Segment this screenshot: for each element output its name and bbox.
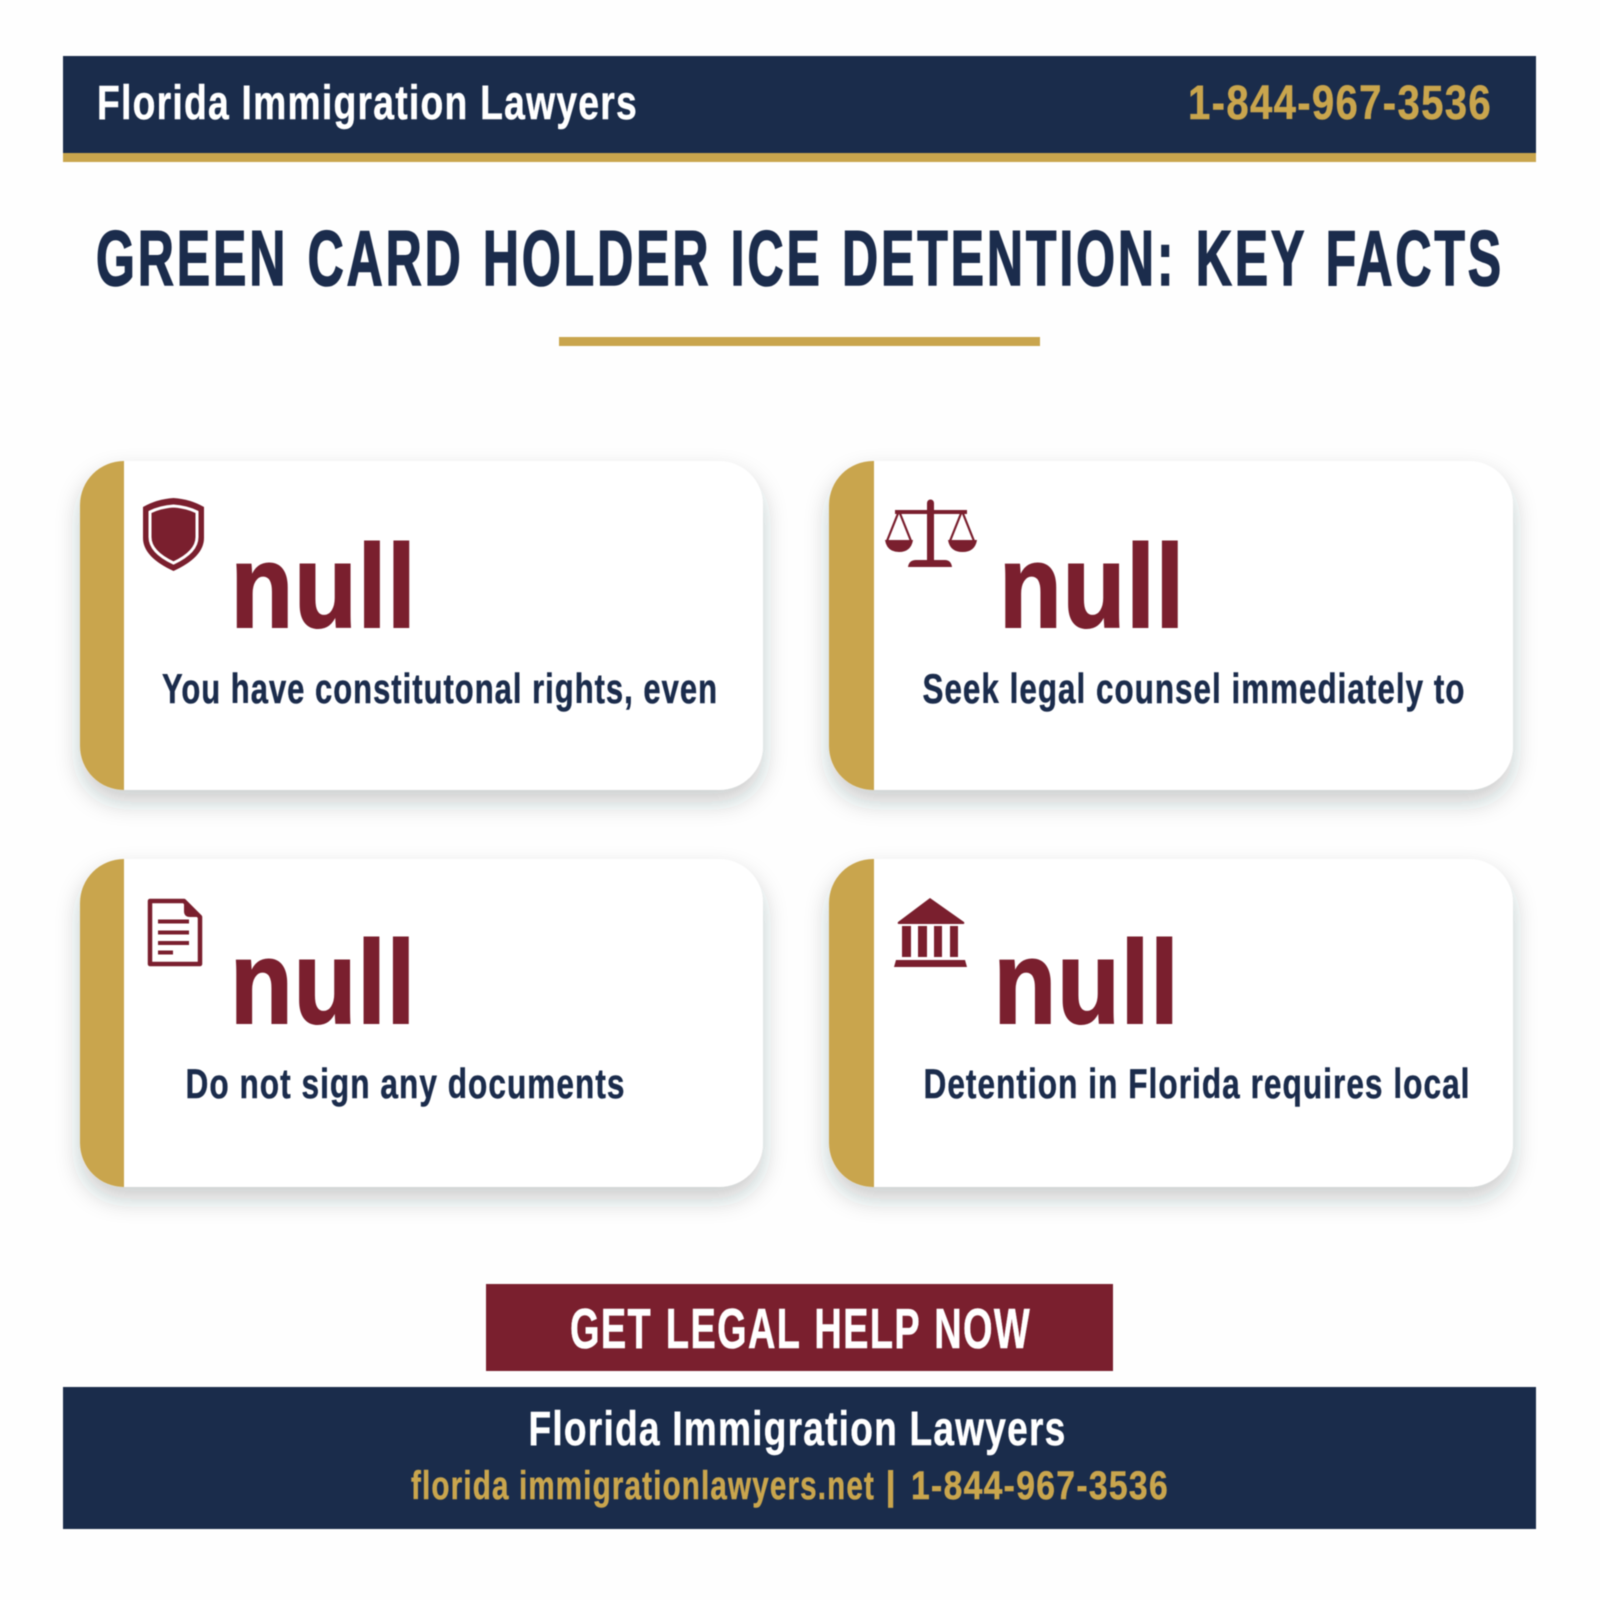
button background [486, 1284, 1113, 1371]
card heading: null [230, 917, 416, 1049]
header banner [63, 56, 1536, 162]
header phone number: 1-844-967-3536 [1188, 77, 1492, 130]
footer website: florida immigrationlawyers.net [411, 1464, 875, 1508]
icon: shield [143, 498, 204, 571]
icon: document [150, 900, 201, 964]
header navy bar [63, 56, 1536, 154]
footer navy bar [63, 1387, 1536, 1529]
icon: scales of justice [885, 500, 977, 567]
panel: legal counsel [829, 461, 1513, 790]
panel: constitutional rights [79, 461, 763, 790]
card background [829, 859, 1513, 1187]
panel: florida detention [829, 859, 1513, 1187]
call to action button [486, 1284, 1113, 1371]
card gold edge [79, 859, 124, 1187]
header firm name: Florida Immigration Lawyers [97, 77, 638, 130]
icon: courthouse [894, 898, 967, 967]
card heading: null [999, 521, 1185, 653]
card description: You have constitutonal rights, even [162, 665, 718, 712]
card heading: null [230, 521, 416, 653]
card gold edge [79, 461, 124, 790]
card background [80, 461, 763, 790]
title gold underline [559, 337, 1040, 346]
card description: Do not sign any documents [186, 1060, 626, 1107]
header gold rule [63, 153, 1536, 162]
footer phone number: 1-844-967-3536 [911, 1464, 1169, 1508]
card gold edge [829, 461, 874, 790]
footer banner [63, 1387, 1536, 1529]
footer separator: | [885, 1464, 896, 1508]
card background [80, 859, 763, 1187]
card gold edge [829, 859, 874, 1187]
panel: do not sign [79, 859, 763, 1187]
card background [829, 461, 1513, 790]
footer contact line [411, 1464, 1169, 1508]
button label: GET LEGAL HELP NOW [570, 1297, 1031, 1361]
footer firm name: Florida Immigration Lawyers [528, 1403, 1066, 1456]
card heading: null [994, 917, 1180, 1049]
